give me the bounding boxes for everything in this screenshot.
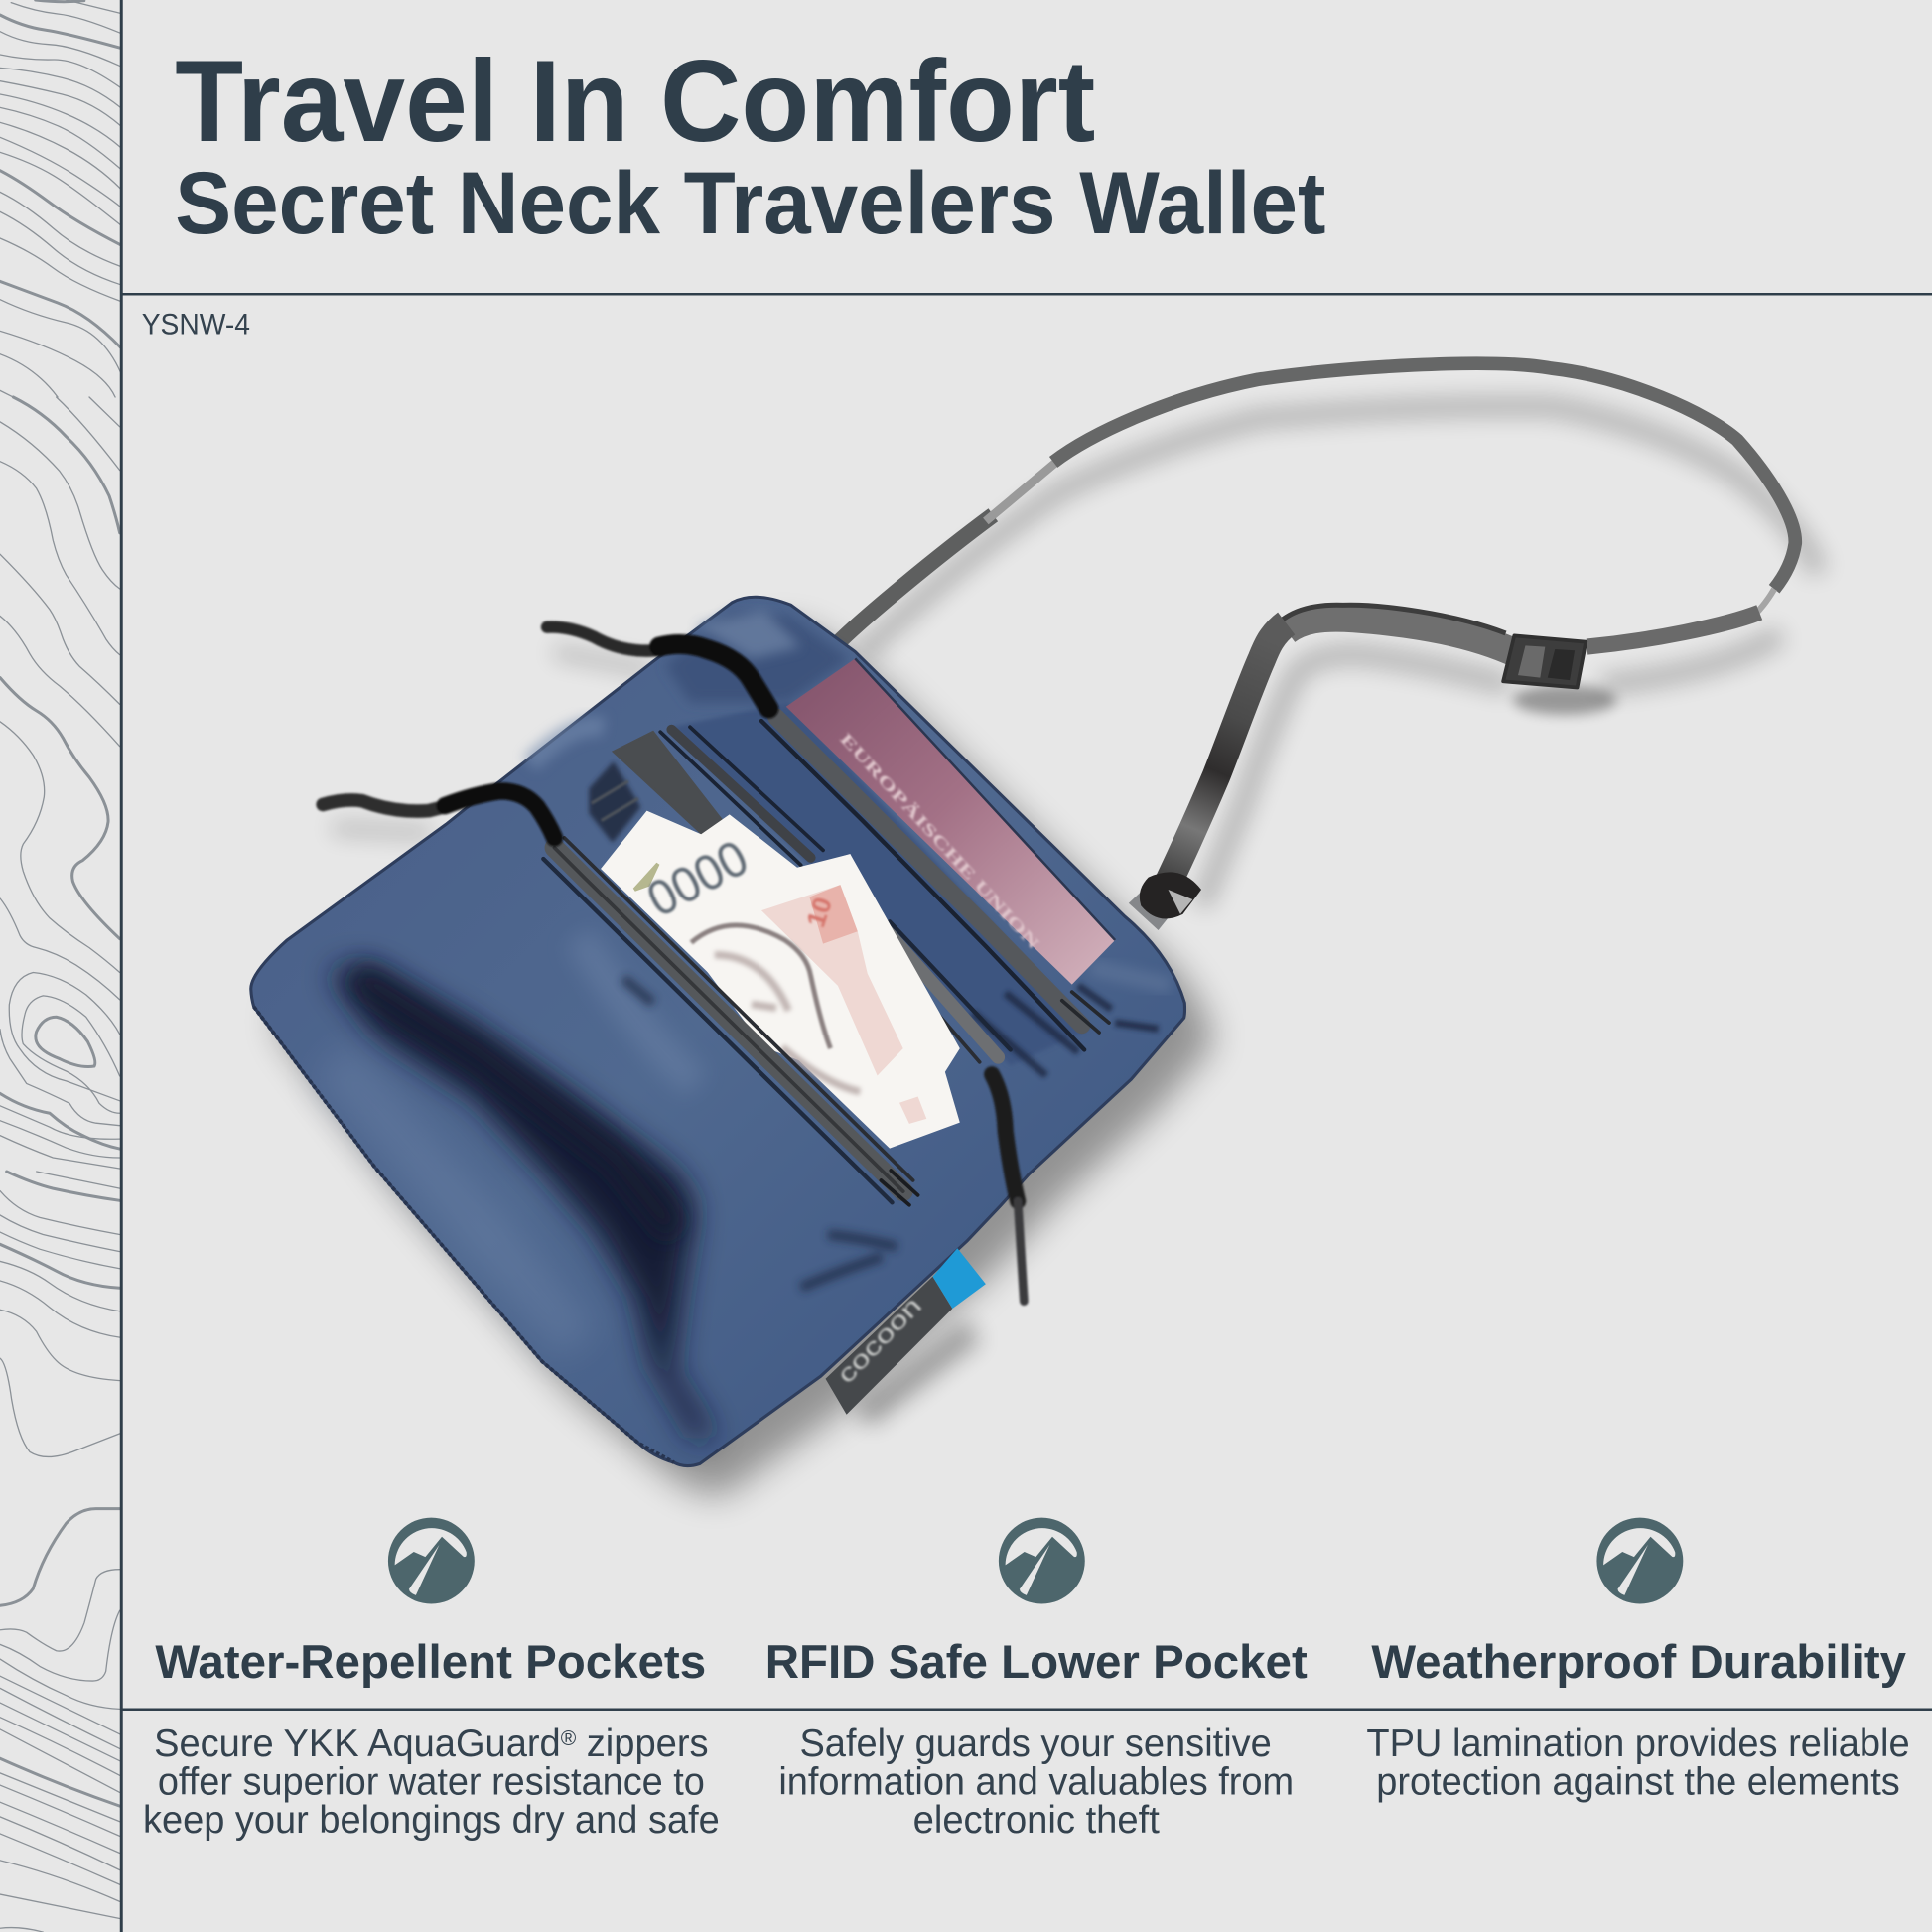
description: Safely guards your sensitive [799,1723,1272,1765]
second zipper [614,727,1011,1062]
heading: Weatherproof Durability [1371,1636,1907,1689]
icon: mountain badge [388,1518,475,1604]
description: TPU lamination provides reliable [1366,1723,1910,1765]
gathered folds [973,986,1159,1075]
topographic contour strip [0,0,120,1932]
feature: water-repellent pockets [143,1518,720,1842]
product photo: neck wallet [251,363,1818,1495]
icon: mountain badge [999,1518,1085,1604]
heading: Water-Repellent Pockets [155,1636,706,1689]
description: offer superior water resistance to [158,1760,705,1803]
lower flap crease [331,966,715,1440]
strap clip [1129,872,1201,930]
description [778,1723,1294,1842]
subtitle: Secret Neck Travelers Wallet [175,154,1325,252]
shadows [278,406,1818,1495]
description: zippers [587,1723,709,1765]
feature: RFID safe lower pocket [765,1518,1308,1842]
description [1366,1723,1910,1803]
brand tag [826,1248,986,1415]
description: electronic theft [913,1799,1160,1842]
strap buckle [1503,635,1586,688]
passport [786,658,1115,985]
banknotes [601,811,960,1149]
wallet body [251,597,1184,1466]
brand tag: cocoon [833,1293,927,1389]
description [143,1723,720,1842]
banknotes: 0000 [638,829,757,927]
title: Travel In Comfort [175,36,1095,166]
feature: weatherproof durability [1366,1518,1910,1803]
description: ® [561,1727,577,1750]
zipper cords [323,627,1024,1302]
banknotes: 10 [800,894,838,931]
zippers [543,717,1109,1205]
icon: mountain badge [1596,1518,1683,1604]
description: Secure YKK AquaGuard [154,1723,561,1765]
heading: RFID Safe Lower Pocket [765,1636,1308,1689]
neck strap [838,363,1795,914]
product code: YSNW-4 [142,308,250,341]
passport: EUROPÄISCHE UNION [836,730,1043,953]
description: keep your belongings dry and safe [143,1799,720,1842]
description: information and valuables from [778,1760,1294,1803]
description: protection against the elements [1376,1760,1900,1803]
upper pocket band [671,702,1090,1066]
